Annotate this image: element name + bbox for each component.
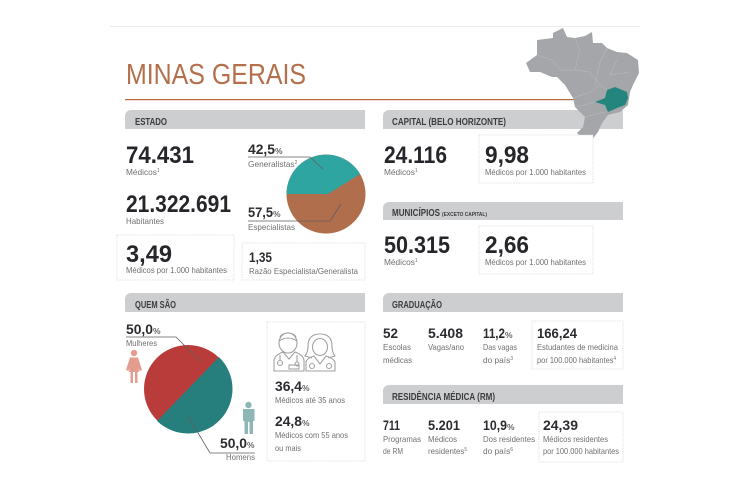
stat: médicos até 35 anos (275, 379, 345, 405)
stat: médicos capital: 1 (415, 168, 418, 174)
callout: médicos por 1.000 capital: 9,98 (485, 142, 529, 169)
label: especialistas (248, 205, 295, 232)
heading: municípios: MUNICÍPIOS (392, 206, 440, 219)
stat: médicos: 74.431 (126, 142, 194, 169)
stat: programas de RM: de RM (383, 446, 403, 456)
label: mulheres: Mulheres (126, 338, 157, 348)
pie chart: gênero (126, 337, 255, 453)
icon: doctors (274, 333, 335, 371)
stat: médicos residentes: Médicos (428, 434, 457, 444)
stat: médicos capital: Médicos (384, 167, 415, 177)
stat: habitantes (126, 191, 231, 226)
callout: estudantes de medicina (532, 321, 623, 369)
heading: residência médica: RESIDÊNCIA MÉDICA (RM) (392, 390, 495, 403)
callout: estudantes de medicina: Estudantes de medicina (537, 342, 618, 352)
panel: residência médica (383, 385, 623, 462)
heading: graduação: GRADUAÇÃO (392, 298, 442, 311)
callout: razão especialista/generalista: 1,35 (249, 250, 272, 265)
callout: razão especialista/generalista (242, 243, 365, 280)
callout: médicos por 1.000 municípios (479, 226, 593, 274)
stat: médicos até 35 anos: % (302, 383, 310, 393)
stat: das vagas do país: 11,2 (483, 326, 505, 341)
heading: estado (125, 110, 365, 129)
stat: médicos capital: 24.116 (384, 142, 447, 169)
callout: estudantes de medicina: por 100.000 habitantes (537, 355, 622, 365)
label: generalistas: % (275, 146, 283, 156)
map of Brazil with Minas Gerais highlighted (526, 28, 639, 145)
stat: programas de RM: Programas (383, 434, 421, 444)
icon: man (243, 402, 254, 434)
label: generalistas: 2 (295, 160, 298, 166)
section bar: capital (383, 110, 623, 129)
stat: dos residentes do país: 6 (510, 447, 513, 453)
icon: woman (126, 350, 142, 383)
stat: vagas por ano: 5.408 (428, 326, 463, 341)
label: especialistas: Especialistas (248, 222, 295, 232)
stat: médicos residentes: residentes (428, 446, 466, 456)
label: homens (220, 436, 255, 462)
callout: médicos por 1.000 habitantes (117, 235, 234, 280)
heading: municípios (383, 202, 623, 220)
label: generalistas (248, 142, 298, 169)
stat: dos residentes do país: 10,9 (483, 418, 507, 433)
callout: médicos por 1.000 habitantes: 3,49 (126, 241, 172, 268)
callout: médicos por 1.000 capital (479, 135, 593, 183)
heading: estado: ESTADO (135, 117, 167, 128)
stat: habitantes: Habitantes (126, 216, 164, 226)
stat: médicos residentes: 5.201 (428, 418, 460, 433)
stat: médicos capital (384, 142, 447, 177)
stat: das vagas do país: Das vagas (483, 342, 517, 352)
stat: vagas por ano (428, 326, 464, 352)
stat: médicos residentes (428, 418, 467, 456)
callout: estudantes de medicina: 4 (613, 356, 616, 362)
panel: capital stats (384, 135, 593, 183)
callout: médicos por 1.000 municípios: 2,66 (485, 232, 529, 259)
label: generalistas: 42,5 (248, 142, 275, 157)
callout: médicos por 1.000 municípios: Médicos por 1.000 habitantes (485, 257, 586, 267)
stat: das vagas do país: 3 (510, 356, 513, 362)
pie chart: generalistas e especialistas (248, 142, 366, 234)
stat: médicos com 55 anos ou mais: 24,8 (275, 414, 302, 429)
callout: médicos residentes por 100.000: Médicos residentes (543, 434, 608, 444)
stat: médicos municípios: 1 (415, 258, 418, 264)
stat: dos residentes do país: do país (483, 446, 510, 456)
stat: escolas médicas: Escolas (383, 342, 411, 352)
label: mulheres: 50,0 (126, 322, 153, 337)
stat: escolas médicas: médicas (383, 355, 412, 365)
stat: dos residentes do país: % (507, 422, 515, 432)
callout: médicos residentes por 100.000: 24,39 (543, 418, 578, 433)
stat: médicos municípios: 50.315 (384, 232, 450, 259)
stat: escolas médicas: 52 (383, 326, 398, 341)
callout: razão especialista/generalista: Razão Especialista/Generalista (249, 266, 358, 276)
stat: dos residentes do país (483, 418, 535, 456)
Minas Gerais state (595, 87, 628, 112)
stat: das vagas do país (483, 326, 517, 365)
heading: municípios: (EXCETO CAPITAL) (442, 212, 487, 218)
stat: das vagas do país: % (505, 330, 513, 340)
stat: escolas médicas (383, 326, 412, 365)
stat: médicos: 1 (157, 168, 160, 174)
section bar: capital: CAPITAL (BELO HORIZONTE) (392, 117, 506, 128)
label: especialistas: % (273, 209, 281, 219)
stat: médicos municípios: Médicos (384, 257, 415, 267)
stat: médicos com 55 anos ou mais: ou mais (275, 443, 301, 453)
label: homens: % (247, 440, 255, 450)
title: MINAS GERAIS (126, 59, 306, 91)
heading: residência médica (383, 385, 623, 404)
callout: médicos por 1.000 capital: Médicos por 1.000 habitantes (485, 167, 586, 177)
stat: médicos com 55 anos ou mais: Médicos com 55 anos (275, 430, 348, 440)
stat: médicos residentes: 5 (464, 447, 467, 453)
stat: programas de RM: 711 (383, 418, 400, 433)
label: mulheres (126, 322, 161, 348)
stat: médicos com 55 anos ou mais: % (302, 418, 310, 428)
label: generalistas: Generalistas (248, 159, 295, 169)
stat: vagas por ano: Vagas/ano (428, 342, 464, 352)
panel: municípios (383, 202, 623, 274)
callout: estudantes de medicina: 166,24 (537, 326, 577, 341)
callout: médicos residentes por 100.000 (539, 412, 623, 462)
label: homens: 50,0 (220, 436, 247, 451)
heading: quem são (125, 293, 365, 312)
label: mulheres: % (153, 326, 161, 336)
panel: quem são (125, 293, 365, 462)
stat: médicos com 55 anos ou mais (275, 414, 348, 453)
stat: médicos até 35 anos: 36,4 (275, 379, 302, 394)
callout: médicos por 1.000 habitantes: Médicos por 1.000 habitantes (126, 265, 227, 275)
label: especialistas: 57,5 (248, 205, 273, 220)
label: homens: Homens (226, 452, 255, 462)
stat: habitantes: 21.322.691 (126, 191, 231, 218)
heading: quem são: QUEM SÃO (135, 298, 176, 311)
callout: médicos residentes por 100.000: por 100.000 habitantes (543, 446, 619, 456)
stat: dos residentes do país: Dos residentes (483, 434, 535, 444)
heading: graduação (383, 293, 623, 312)
callout: idade dos médicos (267, 322, 365, 461)
stat: das vagas do país: do país (483, 355, 510, 365)
stat: médicos até 35 anos: Médicos até 35 anos (275, 395, 345, 405)
panel: estado (117, 110, 366, 280)
stat: programas de RM (383, 418, 421, 456)
panel: graduação (383, 293, 623, 369)
stat: médicos: Médicos (126, 167, 157, 177)
